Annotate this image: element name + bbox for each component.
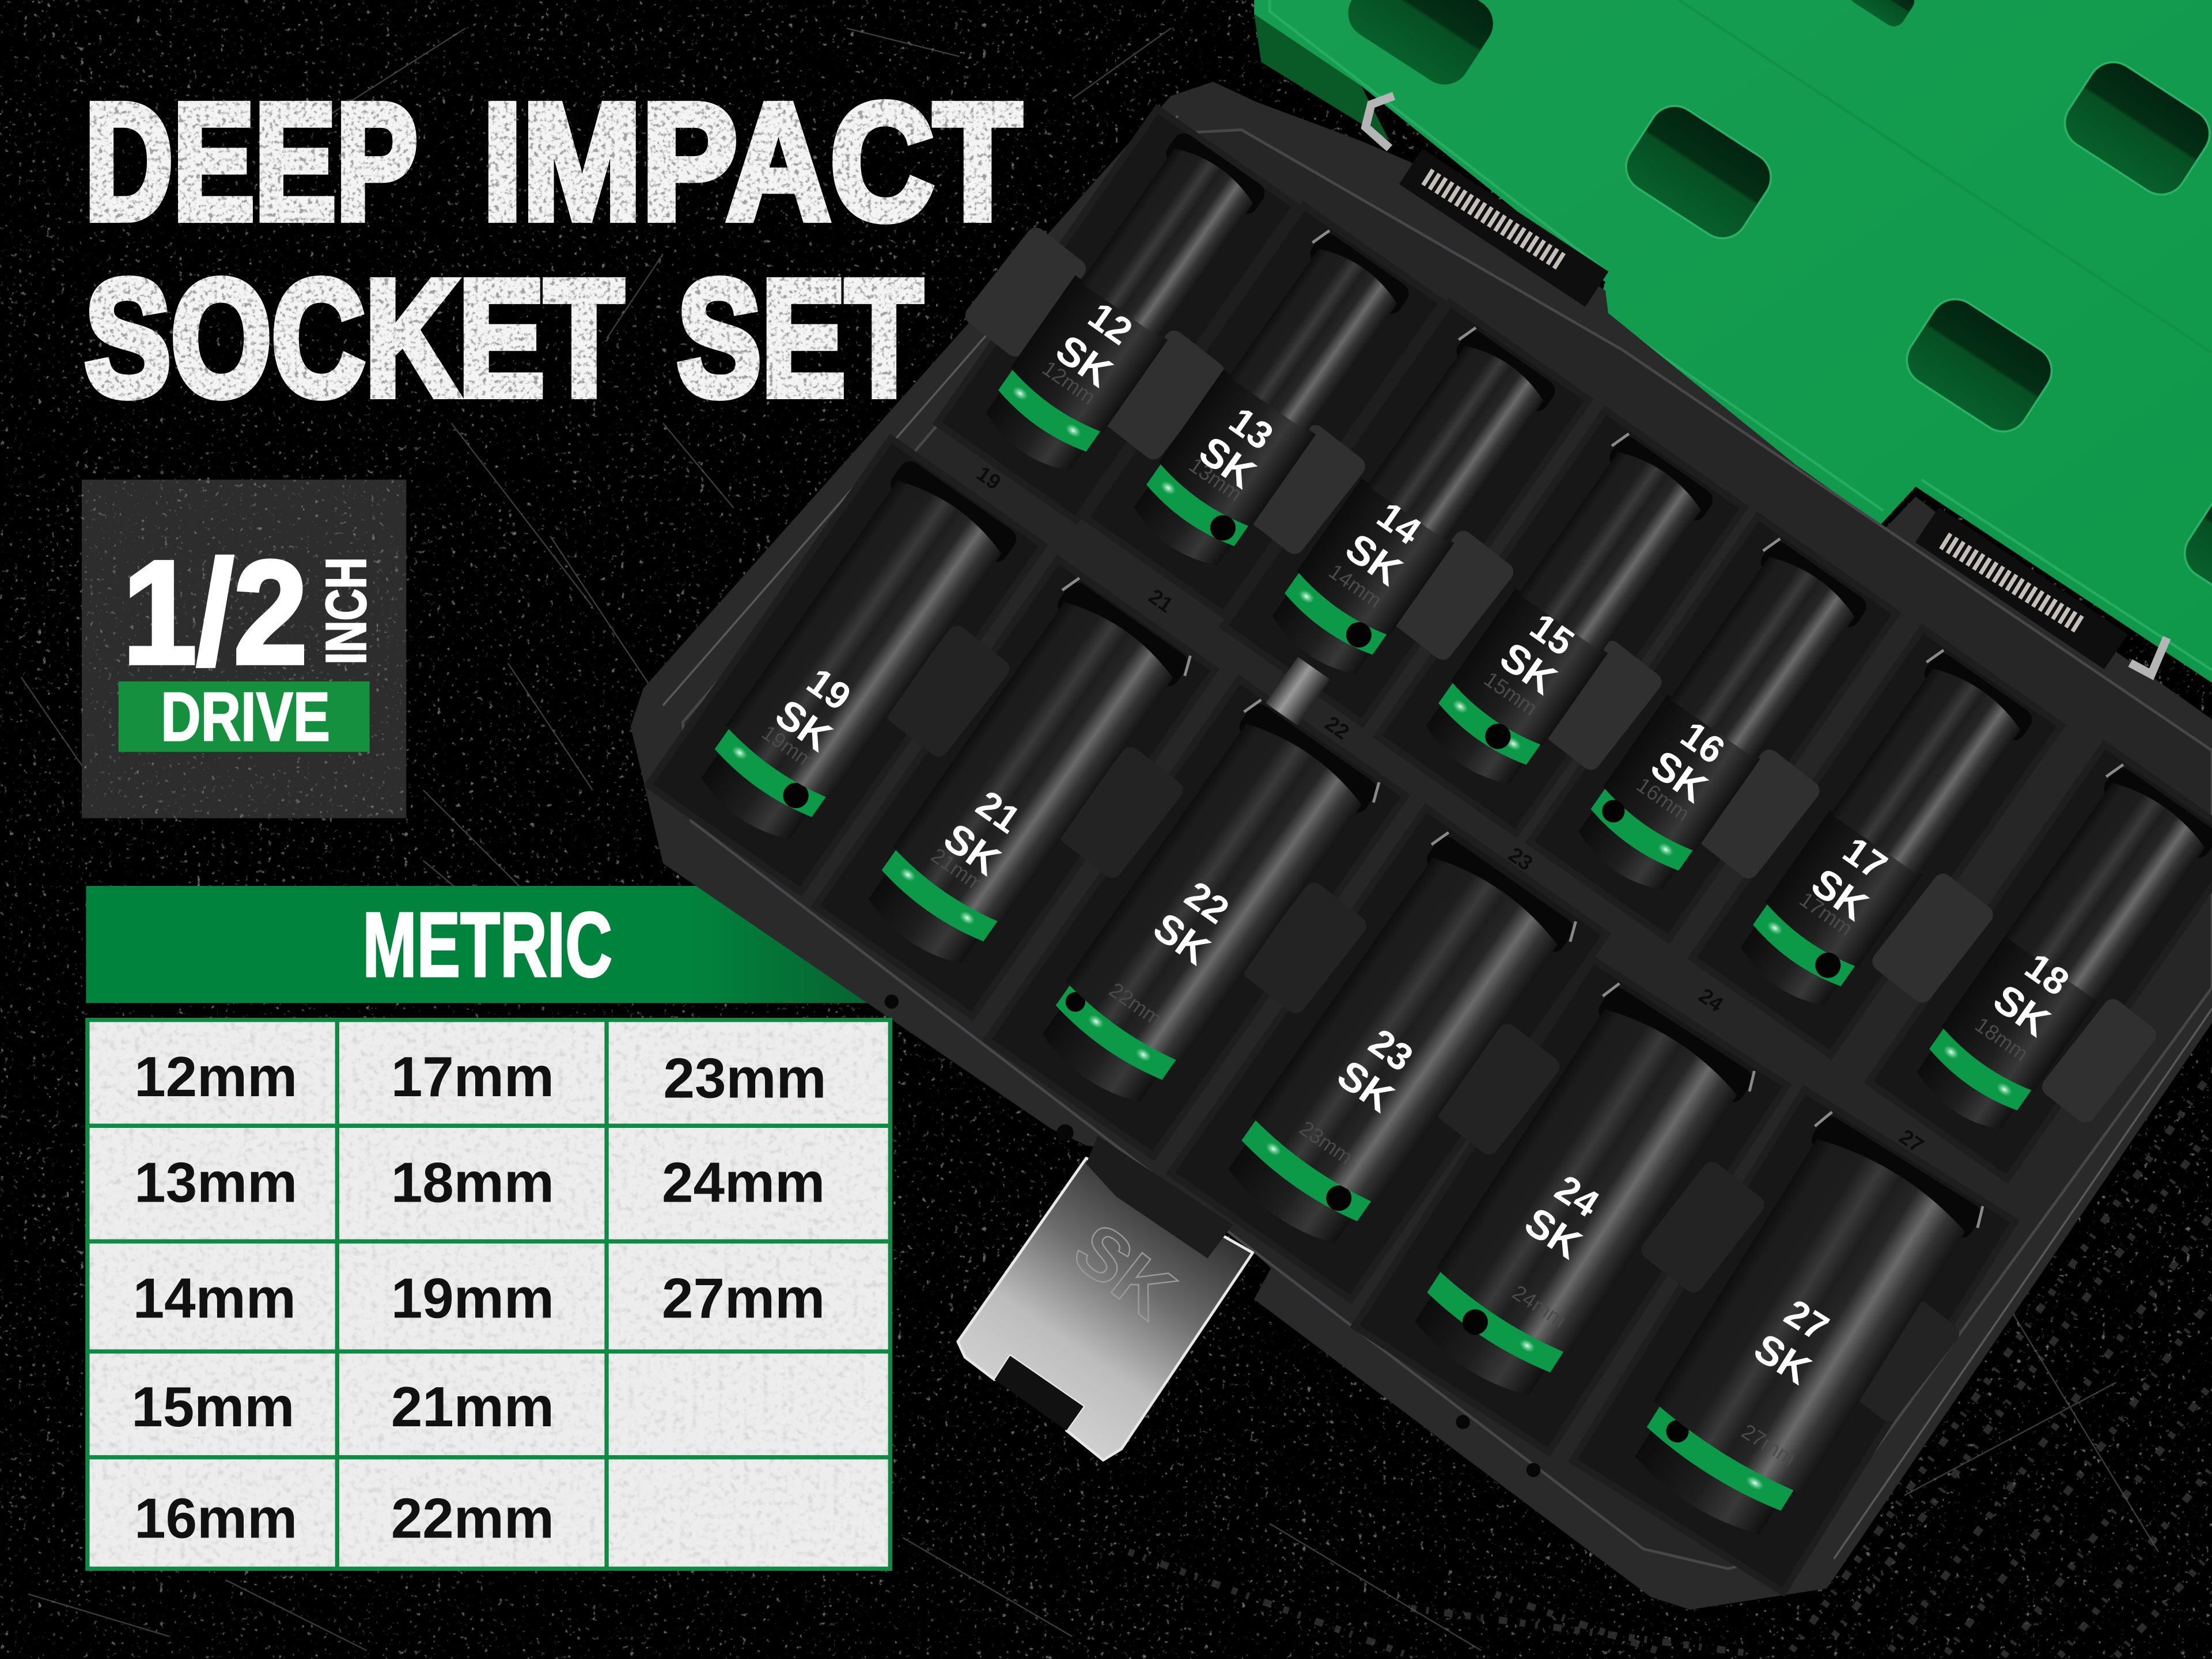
socket 16mm [1567,546,1863,902]
title: IMPACT [483,70,1021,254]
hinge spring [1411,166,1597,289]
socket 12mm: 12 [1081,294,1140,354]
metric header [86,886,918,1003]
socket 17mm: 17mm [1796,887,1857,940]
socket 18mm: SK [1985,976,2058,1046]
metric header: METRIC [362,893,612,996]
socket pockets and hex recesses: 21 [1145,584,1177,617]
socket 23mm: SK [1329,1052,1402,1122]
socket 16mm: SK [1642,742,1715,812]
title: SET [677,246,923,430]
socket pockets and hex recesses [648,109,2212,1592]
socket pockets and hex recesses: 23 [1504,842,1537,875]
badge: 1/2 inch drive: 1/2 [123,530,308,694]
hinge hook [2130,638,2167,675]
socket 19mm [687,472,1008,854]
hinge hook [1366,96,1394,148]
case tray [631,82,2212,1609]
socket 15mm [1415,441,1711,797]
socket 18mm [1906,775,2210,1142]
socket 13mm: SK [1191,428,1263,498]
socket 13mm: 13 [1221,399,1281,459]
socket 23mm: 23 [1361,1021,1421,1080]
size table: 15mm [131,1375,294,1438]
socket 18mm: 18mm [1971,1013,2032,1066]
socket 14mm: 14 [1369,494,1429,553]
socket 13mm: 13mm [1185,453,1247,506]
size table: 13mm [134,1151,297,1214]
size table: 21mm [391,1375,554,1438]
socket pockets and hex recesses: 19 [972,461,1005,494]
badge: 1/2 inch drive [82,480,406,818]
socket 22mm: SK [1145,904,1218,974]
socket 21mm [854,593,1180,979]
lid window [1339,0,1503,94]
socket 16mm: 16mm [1633,773,1694,826]
size table: 22mm [391,1486,554,1550]
socket 15mm: 15mm [1480,667,1541,720]
socket 21mm: 21mm [927,843,988,896]
size table: 24mm [662,1151,825,1214]
socket 24mm: 24 [1548,1167,1607,1226]
socket 23mm [1213,848,1565,1259]
size table: 27mm [662,1266,825,1330]
socket 19mm: 19mm [757,721,819,774]
pin holes [885,995,1540,1477]
size table: 18mm [391,1151,554,1214]
lid window [2175,483,2212,635]
title [85,70,1021,430]
socket 14mm: SK [1337,525,1410,594]
socket 12mm: 12mm [1038,356,1100,409]
socket pockets and hex recesses: 22 [1321,711,1354,744]
socket 15mm: SK [1492,634,1565,703]
size table: 16mm [134,1486,297,1550]
socket 17mm [1730,658,2028,1018]
metal clip tab: SK [1059,1207,1190,1335]
badge: 1/2 inch drive: DRIVE [161,679,330,756]
socket 15mm: 15 [1522,605,1581,664]
socket 19mm: 19 [799,660,858,719]
socket 24mm: 24mm [1508,1281,1570,1332]
socket 27mm: SK [1746,1325,1819,1393]
socket 19mm: SK [767,691,840,760]
socket 27mm: 27mm [1737,1419,1800,1471]
size table: 23mm [664,1046,827,1109]
socket 17mm: 17 [1835,829,1895,888]
size table [88,1020,890,1569]
lid window [2055,52,2212,204]
size table: 14mm [133,1266,296,1330]
title: DEEP [85,70,418,254]
socket pockets and hex recesses: 27 [1895,1124,1928,1157]
green lid [1254,0,2212,683]
socket 18mm: 18 [2017,945,2077,1004]
socket 14mm: 14mm [1324,559,1386,612]
socket 24mm [1399,999,1744,1411]
lid window [1616,96,1781,248]
size table: 17mm [391,1045,554,1108]
socket 27mm: 27 [1777,1291,1836,1350]
socket 12mm [975,135,1266,483]
socket 14mm [1262,333,1556,687]
socket 22mm [1027,714,1368,1118]
socket 21mm: SK [935,815,1008,885]
socket 12mm: SK [1048,326,1120,396]
socket 22mm: 22 [1177,873,1236,933]
size table: 12mm [134,1045,297,1108]
socket 24mm: SK [1517,1199,1589,1268]
lid window [1845,0,1919,31]
socket 21mm: 21 [968,783,1028,842]
hinge spring [1927,525,2116,652]
socket 22mm: 22mm [1105,978,1166,1031]
socket pockets and hex recesses: 24 [1695,983,1728,1017]
badge: 1/2 inch drive: INCH [314,557,377,664]
title: SOCKET [85,246,623,430]
socket 16mm: 16 [1673,713,1732,772]
socket 23mm: 23mm [1296,1116,1357,1169]
size table: 19mm [391,1266,554,1330]
socket 13mm [1123,236,1410,578]
metal clip tab [958,1135,1253,1460]
lid window [1897,289,2062,441]
shiny stub [1266,657,1330,726]
socket 27mm [1617,1128,1972,1551]
socket 17mm: SK [1803,860,1876,930]
